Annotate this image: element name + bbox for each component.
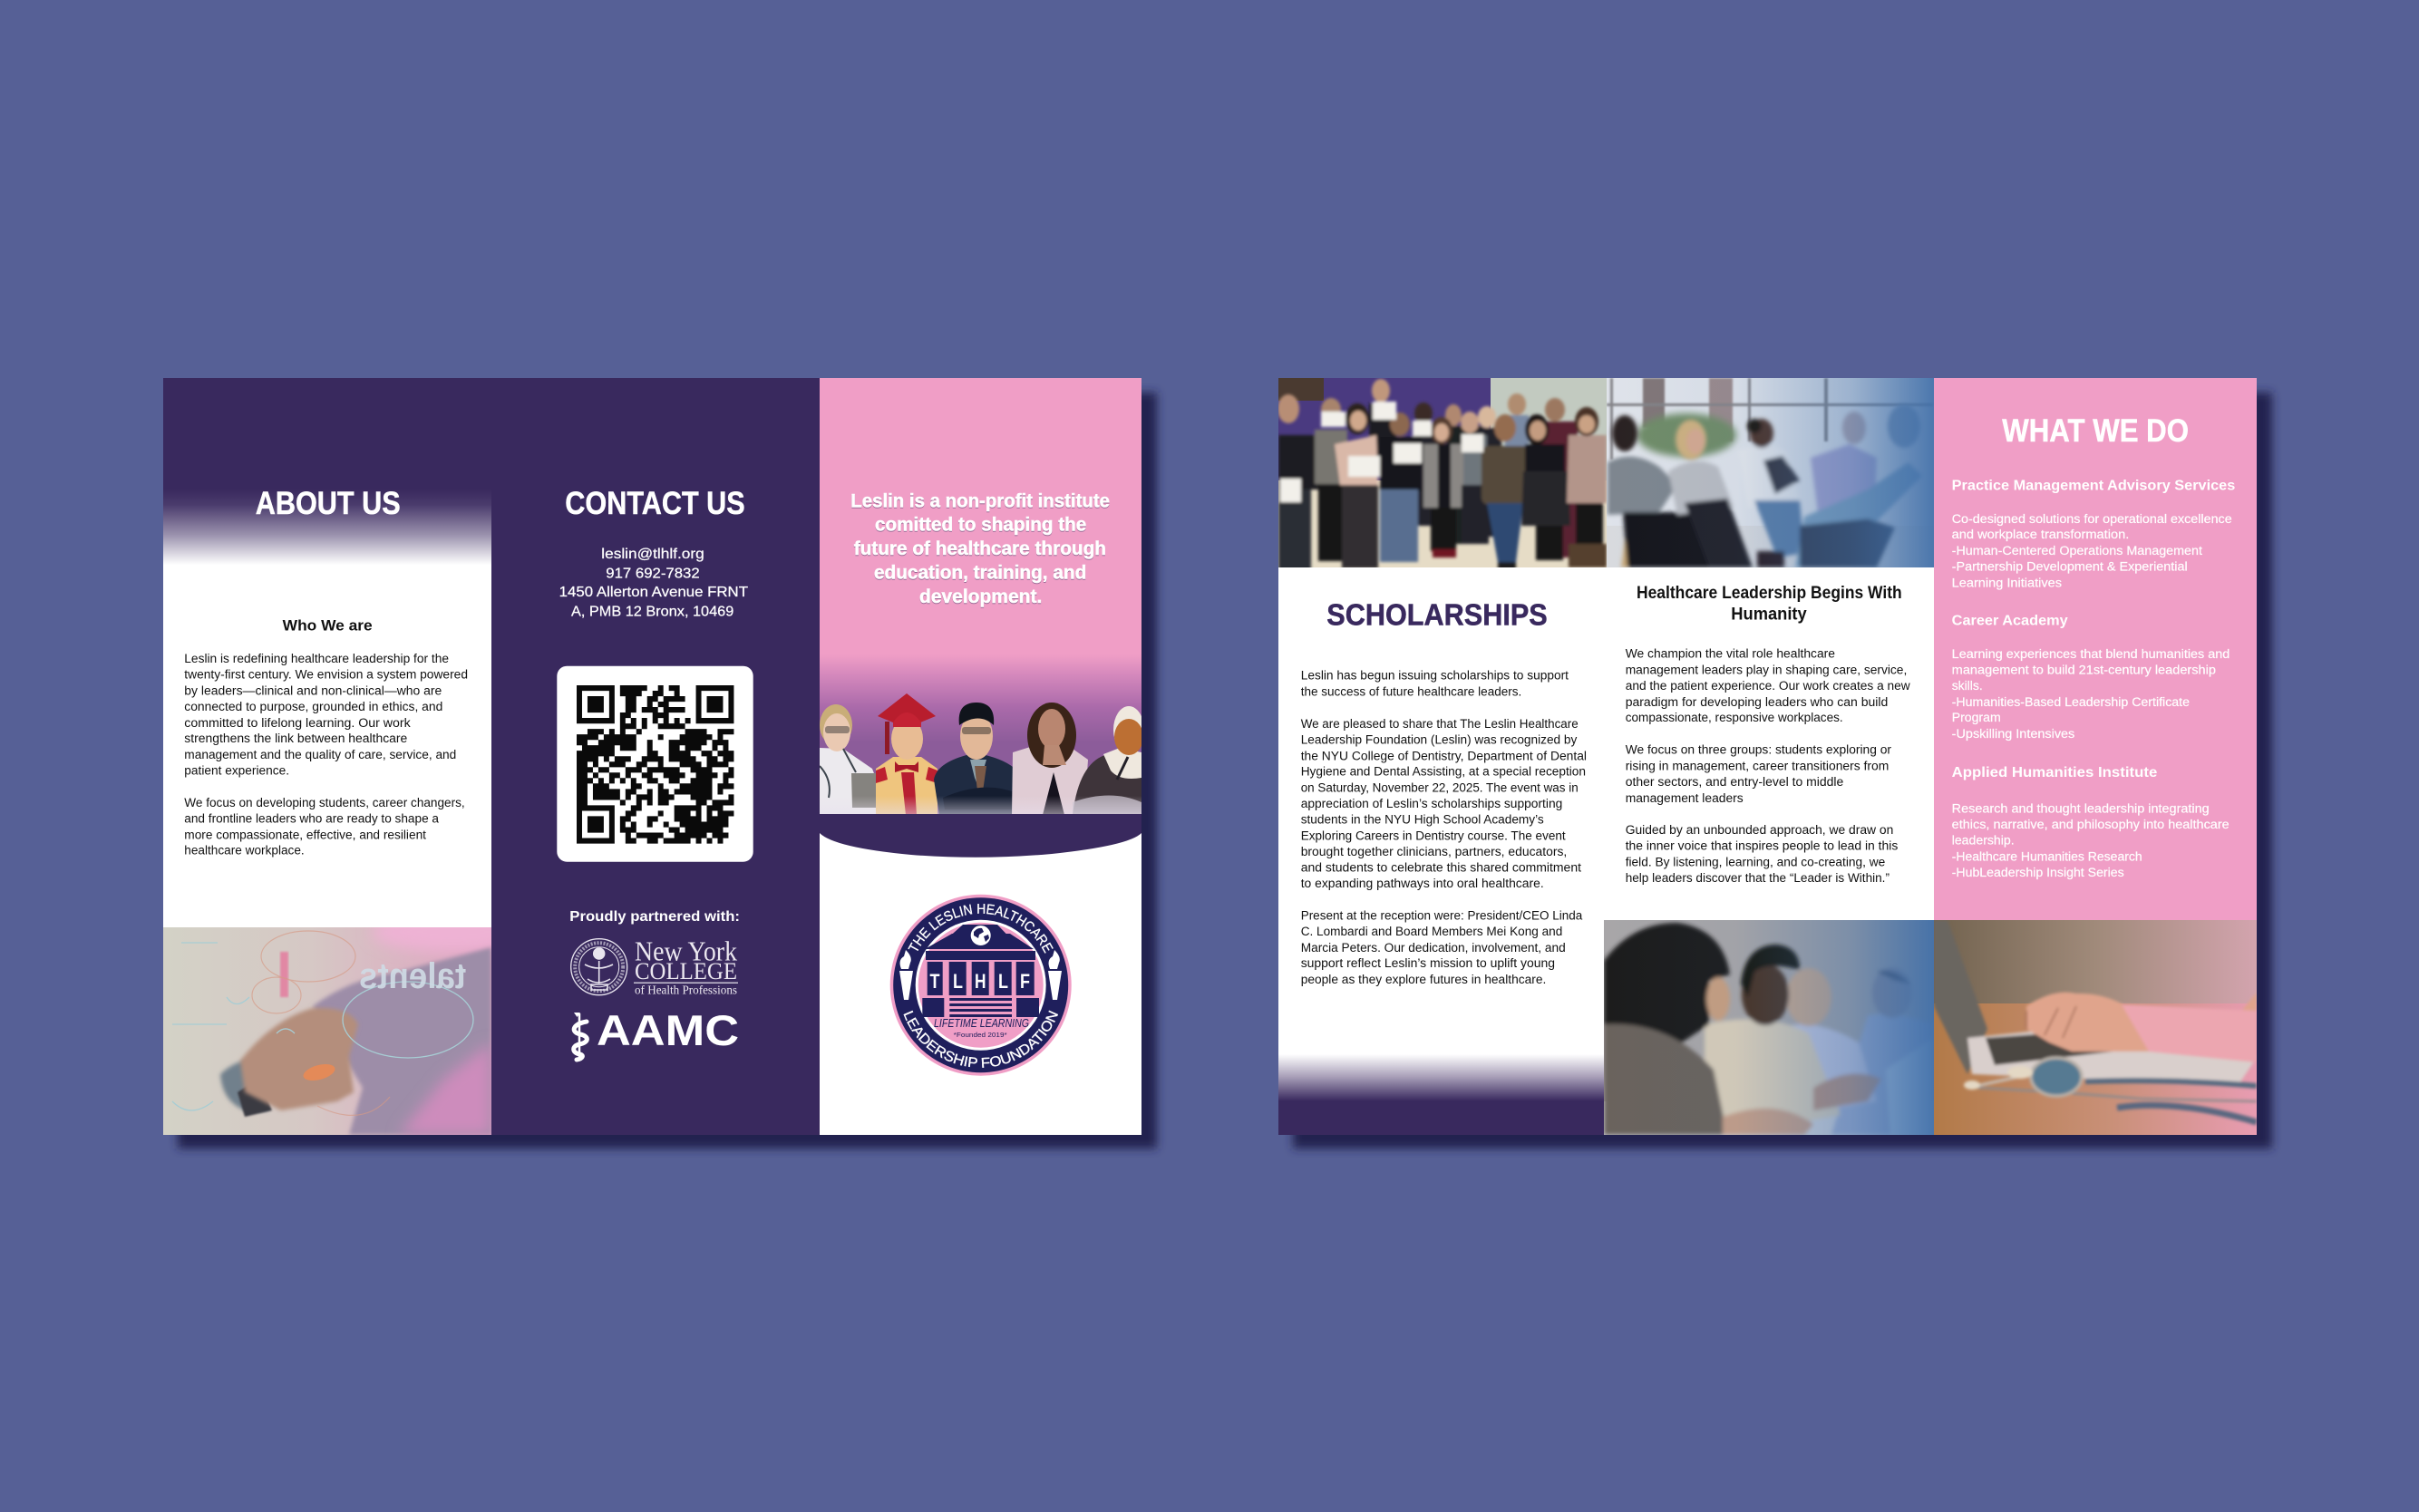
text block: healthcare leadership body: other sectors, and entry-level to middle — [1626, 775, 1843, 790]
logo: The Leslin Healthcare Leadership Foundation seal: L — [998, 970, 1008, 993]
service: applied humanities institute: Applied Humanities Institute — [1952, 765, 2158, 780]
panel: contact us — [491, 378, 820, 1135]
text block: scholarships body: on Saturday, November 22, 2025. The event was in — [1301, 781, 1579, 796]
text block: healthcare leadership body: compassionate, responsive workplaces. — [1626, 711, 1843, 725]
text block: who we are body: twenty-first century. We envision a system powered — [184, 667, 468, 682]
logo: The Leslin Healthcare Leadership Foundation seal: H — [975, 970, 986, 993]
heading: about us: ABOUT US — [256, 486, 401, 521]
panel: about us — [163, 378, 491, 1135]
contact details: 1450 Allerton Avenue FRNT — [559, 585, 748, 600]
text block: who we are body: Leslin is redefining healthcare leadership for the — [184, 652, 449, 666]
service: career academy: -Upskilling Intensives — [1952, 727, 2074, 741]
text block: scholarships body — [1301, 669, 1587, 987]
text block: healthcare leadership body: management leaders play in shaping care, service, — [1626, 663, 1907, 677]
text block: who we are body: connected to purpose, grounded in ethics, and — [184, 700, 442, 714]
text block: who we are body: and frontline leaders who are ready to shape a — [184, 811, 439, 826]
certificates — [1280, 402, 1483, 502]
text block: scholarships body: the NYU College of Dentistry, Department of Dental — [1301, 749, 1587, 763]
text block: who we are body: We focus on developing students, career changers, — [184, 796, 465, 810]
contact details — [559, 547, 748, 620]
logo: New York College of Health Professions: of Health Professions — [635, 984, 737, 997]
service: career academy: Career Academy — [1952, 614, 2068, 629]
photo: typing on laptop with stethoscope — [1934, 920, 2258, 1135]
logo: The Leslin Healthcare Leadership Foundation seal — [890, 894, 1072, 1076]
service: practice management advisory services: Practice Management Advisory Services — [1952, 478, 2235, 493]
service: practice management advisory services: -Partnership Development & Experiential — [1952, 560, 2188, 575]
service: applied humanities institute: leadership. — [1952, 833, 2015, 848]
mission statement: development. — [919, 586, 1042, 607]
text block: who we are body: committed to lifelong learning. Our work — [184, 716, 412, 731]
heading: scholarships: SCHOLARSHIPS — [1326, 598, 1548, 632]
logo: The Leslin Healthcare Leadership Foundation seal: T — [930, 970, 940, 993]
text block: who we are body: healthcare workplace. — [184, 844, 305, 858]
person: woman in hijab — [1073, 706, 1144, 815]
text block: healthcare leadership body: the inner voice that inspires people to lead in this — [1626, 839, 1898, 854]
person: graduate — [876, 693, 937, 815]
panel: mission cover — [820, 378, 1141, 1135]
logo: The Leslin Healthcare Leadership Foundation seal: LIFETIME LEARNING — [934, 1017, 1029, 1030]
text block: healthcare leadership body — [1626, 647, 1910, 886]
text block: healthcare leadership body: Guided by an unbounded approach, we draw on — [1626, 823, 1893, 838]
text block: who we are body — [184, 652, 468, 858]
text block: scholarships body: students in the NYU High School Academy’s — [1301, 812, 1544, 827]
logo: New York College of Health Professions — [571, 935, 738, 997]
service: applied humanities institute: ethics, narrative, and philosophy into healthcare — [1952, 818, 2230, 832]
contact details: leslin@tlhlf.org — [601, 547, 704, 562]
heading: healthcare leadership begins with humanity: Healthcare Leadership Begins With — [1637, 584, 1902, 603]
text block: who we are body: strengthens the link between healthcare — [184, 732, 407, 746]
text block: healthcare leadership body: and the patient experience. Our work creates a new — [1626, 679, 1910, 693]
text block: scholarships body: Exploring Careers in Dentistry course. The event — [1301, 829, 1566, 843]
logo: The Leslin Healthcare Leadership Foundation seal: L — [953, 970, 963, 993]
text block: healthcare leadership body: paradigm for developing leaders who can build — [1626, 695, 1888, 710]
logo: AAMC: AAMC — [597, 1006, 739, 1054]
text block: healthcare leadership body: We champion the vital role healthcare — [1626, 647, 1835, 662]
mission statement: comitted to shaping the — [875, 515, 1086, 536]
text block: scholarships body: C. Lombardi and Board Members Mei Kong and — [1301, 925, 1562, 939]
text block: scholarships body: the success of future healthcare leaders. — [1301, 685, 1521, 700]
service: applied humanities institute: -Healthcare Humanities Research — [1952, 849, 2142, 864]
service: career academy: Program — [1952, 711, 2001, 725]
photo strip: five diverse people — [820, 693, 1144, 815]
partner label: Proudly partnered with: — [569, 909, 740, 925]
photo: support group in bright room — [1607, 378, 1934, 567]
text block: scholarships body: Present at the reception were: President/CEO Linda — [1301, 908, 1582, 923]
service: practice management advisory services — [1952, 478, 2235, 591]
service: applied humanities institute: -HubLeadership Insight Series — [1952, 866, 2124, 880]
drop shadow: right brochure — [1293, 393, 2272, 1149]
drop shadow: left brochure — [178, 393, 1157, 1149]
heading: healthcare leadership begins with humanity: Humanity — [1731, 605, 1807, 624]
service: career academy: skills. — [1952, 679, 1983, 693]
logo: The Leslin Healthcare Leadership Foundation seal: THE LESLIN HEALTHCARE — [908, 904, 1054, 954]
brochure spread mockup — [163, 378, 2278, 1155]
logo: AAMC — [574, 1006, 739, 1061]
service: career academy: Learning experiences that blend humanities and — [1952, 647, 2230, 662]
photo: hand writing on glass board: talents — [359, 956, 466, 996]
text block: scholarships body: We are pleased to share that The Leslin Healthcare — [1301, 717, 1579, 732]
service: practice management advisory services: Co-designed solutions for operational excellence — [1952, 512, 2232, 527]
text block: scholarships body: appreciation of Leslin’s scholarships supporting — [1301, 797, 1562, 811]
curved purple band — [820, 814, 1141, 858]
text block: who we are body: by leaders—clinical and non-clinical—who are — [184, 683, 442, 698]
text block: healthcare leadership body: help leaders discover that the “Leader is Within.” — [1626, 871, 1890, 886]
service: career academy: -Humanities-Based Leadership Certificate — [1952, 695, 2190, 710]
photo: hand writing on glass board — [163, 927, 491, 1135]
text block: scholarships body: brought together clinicians, partners, educators, — [1301, 845, 1567, 859]
mission statement: education, training, and — [874, 562, 1086, 584]
panel: what we do — [1934, 378, 2258, 1135]
torches — [899, 950, 1062, 1000]
text block: scholarships body: support reflect Leslin’s mission to uplift young — [1301, 956, 1555, 971]
contact details: A, PMB 12 Bronx, 10469 — [571, 604, 733, 620]
service: career academy: management to build 21st-century leadership — [1952, 663, 2216, 677]
text block: scholarships body: Leadership Foundation (Leslin) was recognized by — [1301, 732, 1578, 747]
service: practice management advisory services: -Human-Centered Operations Management — [1952, 544, 2202, 558]
service: practice management advisory services: Learning Initiatives — [1952, 577, 2062, 591]
person: woman with curly hair — [1012, 703, 1088, 815]
mission statement — [850, 490, 1110, 607]
logo: The Leslin Healthcare Leadership Foundation seal: LEADERSHIP FOUNDATION — [903, 1010, 1058, 1068]
text block: scholarships body: Leslin has begun issuing scholarships to support — [1301, 669, 1569, 683]
heading: healthcare leadership begins with humanity — [1637, 584, 1902, 624]
person: man in suit — [934, 703, 1013, 814]
text block: healthcare leadership body: rising in management, career transitioners from — [1626, 760, 1889, 774]
temple emblem — [922, 925, 1039, 1017]
logo: The Leslin Healthcare Leadership Foundation seal: *Founded 2019* — [954, 1032, 1007, 1039]
globe — [970, 925, 991, 946]
text block: healthcare leadership body: field. By listening, learning, and co-creating, we — [1626, 856, 1885, 870]
logo: New York College of Health Professions: New York — [635, 935, 737, 966]
people behind — [1369, 403, 1396, 467]
text block: who we are body: patient experience. — [184, 763, 289, 778]
text block: scholarships body: to expanding pathways into oral healthcare. — [1301, 877, 1544, 891]
text block: scholarships body: people as they explore futures in healthcare. — [1301, 973, 1546, 987]
text block: who we are body: management and the quality of care, service, and — [184, 748, 456, 762]
service: practice management advisory services: and workplace transformation. — [1952, 528, 2129, 542]
heading: contact us: CONTACT US — [565, 486, 745, 521]
text block: scholarships body: Hygiene and Dental Assisting, at a special reception — [1301, 765, 1586, 780]
logo: The Leslin Healthcare Leadership Foundation seal: F — [1020, 970, 1030, 993]
mission statement: Leslin is a non-profit institute — [850, 490, 1110, 511]
person: doctor — [820, 704, 876, 814]
text block: healthcare leadership body: We focus on three groups: students exploring or — [1626, 743, 1891, 758]
subheading: who we are: Who We are — [283, 617, 373, 635]
front row — [1278, 435, 1318, 489]
service: career academy — [1952, 614, 2230, 741]
service: applied humanities institute: Research and thought leadership integrating — [1952, 802, 2210, 817]
panel: scholarships — [1278, 378, 1608, 1135]
contact details: 917 692-7832 — [606, 566, 700, 581]
heading: what we do: WHAT WE DO — [2002, 413, 2189, 449]
text block: who we are body: more compassionate, effective, and resilient — [184, 828, 426, 842]
QR code card — [557, 666, 753, 862]
photo: colleagues working on laptop — [1604, 920, 1934, 1135]
panel: healthcare leadership — [1604, 378, 1934, 1135]
service: applied humanities institute — [1952, 765, 2230, 880]
photo: group of scholarship recipients — [1278, 378, 1608, 571]
logo: New York College of Health Professions: COLLEGE — [635, 958, 737, 984]
text block: scholarships body: and students to celebrate this shared commitment — [1301, 861, 1581, 876]
text block: scholarships body: Marcia Peters. Our dedication, involvement, and — [1301, 941, 1566, 955]
text block: healthcare leadership body: management leaders — [1626, 791, 1744, 806]
mission statement: future of healthcare through — [854, 538, 1106, 559]
